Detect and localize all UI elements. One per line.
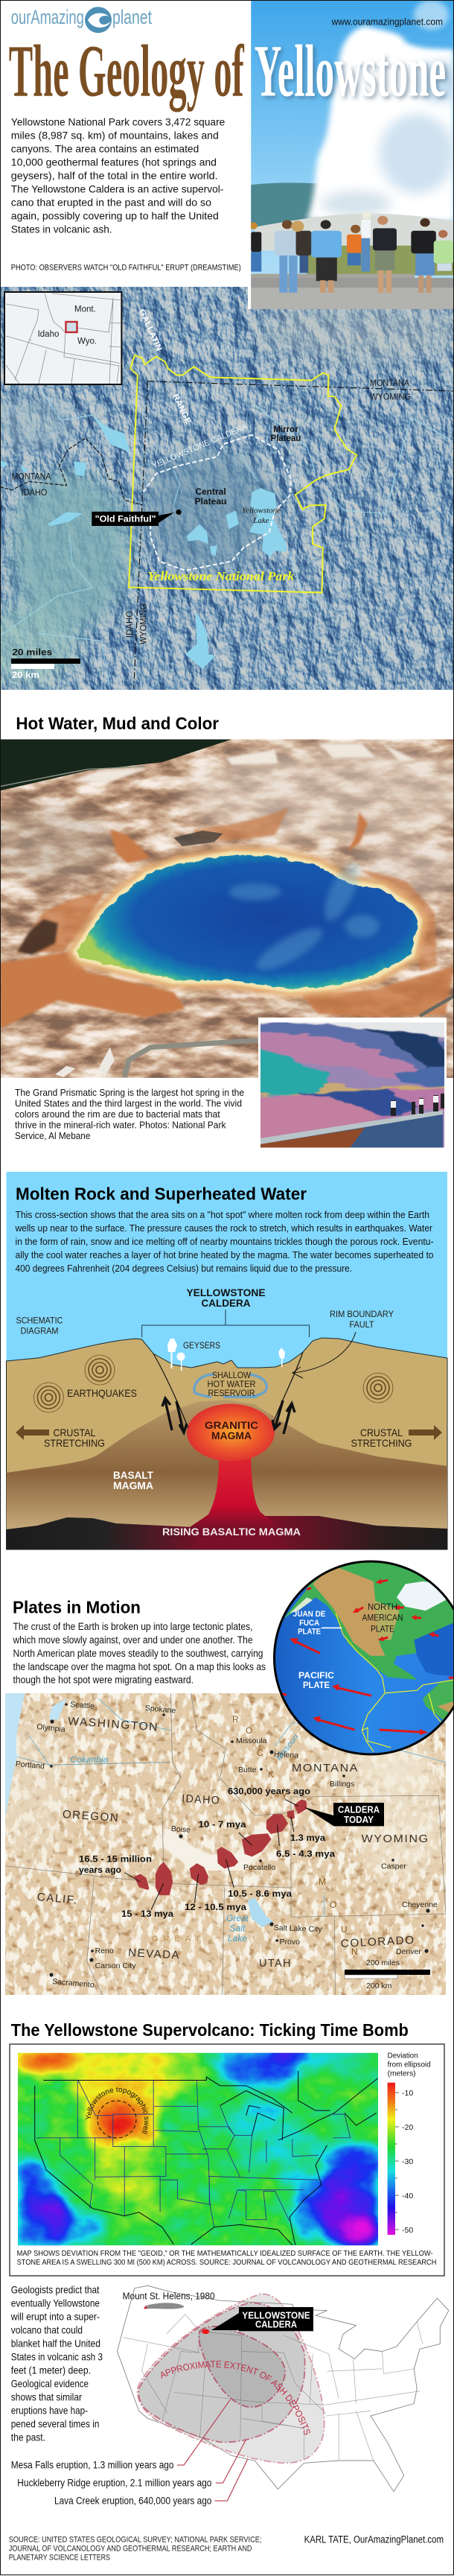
prediction text: blanket half the United: [11, 2337, 100, 2349]
diagram: faults: [153, 1352, 303, 1434]
logo: ourAmazing: [11, 6, 84, 28]
section: plates in motion: [5, 1560, 453, 1995]
website url: www.ouramazingplanet.com: [331, 16, 443, 27]
eruption labels: [11, 2459, 211, 2506]
state and city labels: Denver: [396, 1947, 421, 1956]
inset photo: boardwalk and bacterial mats: [258, 1018, 447, 1147]
diagram: magma plume: [187, 1403, 279, 1527]
state and city labels: Butte: [238, 1766, 257, 1774]
diagram labels: STRETCHING: [44, 1437, 105, 1449]
map labels: MONTANA: [370, 379, 409, 388]
legend: from ellipsoid: [388, 2061, 431, 2069]
curved label: ash deposits: APPROXIMATE EXTENT OF ASH DEPOSITS: [161, 2361, 310, 2434]
diagram labels: FAULT: [350, 1319, 374, 1330]
diagram labels: CRUSTAL: [54, 1427, 96, 1438]
diagram: geysers: [167, 1339, 285, 1371]
diagram labels: YELLOWSTONE: [186, 1287, 265, 1298]
diagram labels: RIM BOUNDARY: [330, 1309, 394, 1319]
leader lines: [124, 1800, 298, 1910]
legend: [388, 2052, 431, 2235]
panel: geoid map: [9, 2043, 445, 2305]
spring caption: thrive in the mineral-rich water. Photos: National Park: [15, 1120, 226, 1131]
prediction text: feet (1 meter) deep.: [11, 2364, 91, 2376]
diagram labels: CRUSTAL: [360, 1427, 403, 1438]
diagram: caldera bracket: [142, 1310, 310, 1337]
globe: tectonic plates: PACIFIC: [298, 1670, 334, 1681]
callout: Yellowstone caldera: CALDERA: [255, 2318, 298, 2330]
caldera outline: [144, 435, 291, 571]
state and city labels: R: [232, 1714, 239, 1725]
callout: Old Faithful: "Old Faithful": [95, 514, 156, 524]
map labels: MONTANA: [12, 473, 51, 482]
photo caption: PHOTO: OBSERVERS WATCH "OLD FAITHFUL" ERUPT (DREAMSTIME): [11, 263, 241, 272]
age labels: [79, 1788, 336, 1919]
map labels: Plateau: [271, 434, 301, 443]
state and city labels: MONTANA: [292, 1762, 359, 1774]
callout: caldera today: CALDERA: [338, 1804, 380, 1815]
eruption labels: Huckleberry Ridge eruption, 2.1 million years ago: [17, 2477, 211, 2488]
state and city labels: U: [341, 1924, 348, 1935]
body text: North American plate moves steadily to the southwest, carrying: [13, 1648, 263, 1659]
age labels: 1.3 mya: [290, 1834, 326, 1843]
map caption: [17, 2249, 436, 2267]
source credits: SOURCE: UNITED STATES GEOLOGICAL SURVEY; NATIONAL PARK SERVICE;: [9, 2535, 261, 2544]
header section: [9, 0, 454, 309]
diagram labels: RISING BASALTIC MAGMA: [162, 1526, 301, 1538]
diagram labels: MAGMA: [113, 1479, 153, 1491]
diagram labels: EARTHQUAKES: [67, 1387, 137, 1399]
logo: [11, 6, 152, 33]
state and city labels: Pocatello: [243, 1863, 275, 1872]
state and city labels: Reno: [95, 1947, 114, 1955]
heading: Plates in Motion: [13, 1598, 141, 1617]
state and city labels: Great: [226, 1913, 249, 1923]
Mount St. Helens label: Mount St. Helens, 1980: [123, 2291, 215, 2302]
map labels: GALLATIN: [137, 308, 164, 352]
city markers: [49, 1703, 430, 1977]
intro text: geysers), half of the total in the entire world.: [11, 169, 218, 181]
age labels: 16.5 - 15 million: [79, 1856, 152, 1865]
state and city labels: Helena: [274, 1750, 299, 1760]
map labels: IDAHO: [21, 489, 47, 498]
state and city labels: Salt Lake City: [274, 1923, 323, 1934]
map labels: Yellowstone: [242, 507, 281, 515]
scale bar: 20 miles: [12, 647, 53, 658]
Yellowstone topographic swell: Yellowstone topographic swell: [86, 2087, 149, 2135]
map labels: Lake: [252, 516, 269, 525]
state boundaries: [0, 381, 454, 689]
prediction text: volcano that could: [11, 2323, 83, 2335]
map labels: IDAHO: [126, 611, 135, 638]
legend: -10: [402, 2089, 413, 2098]
age labels: 10.5 - 8.6 mya: [228, 1890, 292, 1899]
diagram: crust layers: [6, 1338, 447, 1549]
map labels: WYOMING: [140, 603, 149, 644]
map labels: Plateau: [195, 496, 226, 507]
globe: tectonic plates: [274, 1561, 454, 1755]
intro text: The Yellowstone Caldera is an active supervol-: [11, 183, 224, 194]
section: supervolcano: [9, 2020, 450, 2562]
legend: -20: [402, 2123, 413, 2132]
legend: (meters): [388, 2069, 416, 2078]
state and city labels: NEVADA: [128, 1947, 181, 1962]
ash extent map: [11, 2285, 450, 2506]
park boundary: [129, 355, 357, 593]
locator inset map: Idaho: [38, 330, 59, 339]
body text: the landscape over the magma hot spot. On a map this looks as: [13, 1661, 266, 1672]
prediction text: States in volcanic ash 3: [11, 2350, 103, 2362]
diagram labels: CALDERA: [201, 1297, 250, 1309]
intro text: Yellowstone National Park covers 3,472 square: [11, 115, 225, 127]
state and city labels: Spokane: [144, 1704, 176, 1716]
state and city labels: M: [319, 1877, 326, 1887]
state and city labels: Casper: [381, 1862, 406, 1871]
globe: tectonic plates: PLATE: [303, 1680, 330, 1690]
state and city labels: Lake: [228, 1933, 247, 1944]
diagram labels: SCHEMATIC: [16, 1316, 63, 1326]
body text: [13, 1621, 266, 1686]
source credits: JOURNAL OF VOLCANOLOGY AND GEOTHERMAL RESEARCH; EARTH AND: [9, 2544, 252, 2553]
body text: though the hot spot were migrating eastward.: [13, 1675, 194, 1686]
terrain base: [0, 287, 454, 690]
people watching the geyser: [249, 212, 453, 293]
intro text: [11, 115, 225, 235]
caldera location: [202, 2329, 209, 2334]
scale bar: [11, 647, 80, 680]
intro text: States in volcanic ash.: [11, 223, 112, 235]
map labels: Mirror: [273, 425, 298, 434]
locator inset map: Mont.: [74, 305, 96, 314]
state and city labels: Salt: [230, 1923, 246, 1934]
state and city labels: Carson City: [95, 1961, 136, 1970]
map labels: RANGE: [170, 393, 193, 425]
body text: which move slowly against, over and under one another. The: [13, 1634, 252, 1646]
state and city labels: N: [351, 1947, 358, 1957]
intro text: canyons. The area contains an estimated: [11, 142, 199, 154]
age labels: years ago: [79, 1866, 121, 1875]
map labels: Yellowstone National Park: [147, 569, 295, 583]
diagram: crustal stretching arrows: [16, 1425, 442, 1440]
state and city labels: IDAHO: [182, 1792, 221, 1807]
prediction text: shows that similar: [11, 2391, 82, 2402]
hot spot track map: [5, 1693, 446, 1995]
state lines: [123, 2315, 423, 2461]
state and city labels: COLORADO: [340, 1934, 415, 1950]
source credits: PLANETARY SCIENCE LETTERS: [9, 2553, 110, 2562]
Huckleberry Ridge extent: [138, 2303, 305, 2442]
globe: tectonic plates: NORTH: [368, 1602, 397, 1612]
diagram labels: STRETCHING: [351, 1437, 412, 1449]
diagram labels: SHALLOW: [212, 1370, 252, 1380]
diagram: water circulation arrows: [194, 1374, 266, 1397]
section: hot water, mud and color: [0, 714, 454, 1155]
intro text: again, possibly covering up to half the United: [11, 209, 219, 221]
state and city labels: Columbia: [71, 1754, 109, 1765]
map labels: [12, 308, 411, 644]
state and city labels: [15, 1700, 438, 1990]
state and city labels: Sacramento: [52, 1977, 95, 1990]
body text: in the form of rain, snow and ice melting off of nearby mountains trickles though the porous rock. Eventu-: [15, 1236, 433, 1247]
globe: tectonic plates: FUCA: [299, 1619, 319, 1628]
prediction text: eventually Yellowstone: [11, 2297, 100, 2309]
state and city labels: Missoula: [236, 1736, 267, 1745]
heading: The Yellowstone Supervolcano: Ticking Time Bomb: [11, 2020, 409, 2040]
state and city labels: O: [330, 1900, 336, 1910]
state and city labels: K: [268, 1769, 274, 1780]
state and city labels: O: [246, 1725, 252, 1736]
state and city labels: OREGON: [62, 1808, 120, 1824]
eruption labels: Lava Creek eruption, 640,000 years ago: [54, 2495, 211, 2506]
diagram labels: HOT WATER: [207, 1379, 256, 1389]
legend: -30: [402, 2157, 413, 2166]
body text: This cross-section shows that the area sits on a "hot spot" where molten rock from deep within the Earth: [15, 1209, 429, 1220]
locator inset map: Wyo.: [77, 337, 97, 346]
prediction text: will erupt into a super-: [10, 2310, 100, 2322]
globe: tectonic plates: AMERICAN: [362, 1613, 403, 1623]
geoid colour field: [18, 2053, 378, 2245]
diagram labels: GRANITIC: [205, 1419, 258, 1431]
legend: Deviation: [388, 2052, 418, 2061]
map labels: Central: [195, 486, 226, 497]
age labels: 10 - 7 mya: [198, 1821, 246, 1830]
body text: 400 degrees Fahrenheit (204 degrees Celsius) but remains liquid due to the pressure.: [15, 1263, 352, 1274]
lakes: [0, 418, 287, 669]
diagram: earthquake rings: [33, 1355, 393, 1412]
photo: Grand Prismatic Spring: [0, 739, 454, 1079]
spring caption: The Grand Prismatic Spring is the largest hot spring in the: [15, 1088, 244, 1098]
state and city labels: Olympia: [36, 1722, 65, 1734]
callout: Old Faithful: [92, 510, 182, 526]
prediction text: pened several times in: [11, 2417, 99, 2429]
diagram: rim fault pointer: [292, 1332, 356, 1378]
prediction text: Geologists predict that: [11, 2283, 100, 2295]
eruption leader lines: [177, 2399, 248, 2501]
state and city labels: C: [257, 1748, 263, 1758]
Lava Creek extent: [138, 2294, 324, 2463]
age labels: 12 - 10.5 mya: [185, 1903, 247, 1912]
body text: [15, 1209, 434, 1274]
map labels: WYOMING: [370, 393, 411, 402]
spring caption: United States and the third largest in the world. The vivid: [15, 1098, 242, 1108]
map scale bar: [345, 1958, 430, 1990]
diagram labels: MAGMA: [211, 1430, 252, 1441]
callout: Yellowstone caldera: [211, 2307, 313, 2331]
callout: Yellowstone caldera: YELLOWSTONE: [242, 2309, 310, 2320]
state and city labels: Cheyenne: [402, 1900, 438, 1909]
US outline: [118, 2285, 449, 2492]
age labels: 630,000 years ago: [228, 1788, 310, 1797]
body text: ally the cool water reaches a layer of hot brine heated by the magma. The water becomes superheated to: [15, 1249, 433, 1260]
state and city labels: UTAH: [259, 1957, 292, 1970]
spring caption: Service, Al Mebane: [15, 1131, 90, 1141]
legend: -40: [402, 2192, 413, 2201]
globe: tectonic plates: PLATE: [371, 1624, 394, 1634]
callout: caldera today: [304, 1803, 384, 1826]
intro text: cano that erupted in the past and will do so: [11, 196, 211, 208]
diagram labels: RESERVOIR: [208, 1388, 255, 1398]
map base: [5, 1693, 446, 1995]
age labels: 6.5 - 4.3 mya: [276, 1850, 336, 1859]
intro text: miles (8,987 sq. km) of mountains, lakes and: [11, 129, 219, 141]
callout: caldera today: TODAY: [344, 1815, 374, 1825]
diagram labels: GEYSERS: [183, 1340, 220, 1351]
state borders: [35, 2071, 378, 2245]
map scale bar: 200 km: [366, 1982, 392, 1990]
map scale bar: 200 miles: [366, 1958, 400, 1967]
diagram labels: [16, 1287, 412, 1538]
state and city labels: WASHINGTON: [68, 1715, 159, 1734]
locator inset map: [4, 292, 122, 384]
panel: molten rock cross-section: [6, 1172, 447, 1549]
logo: planet: [112, 6, 152, 28]
heading: Molten Rock and Superheated Water: [16, 1184, 307, 1204]
Mesa Falls extent: [199, 2326, 285, 2408]
state and city labels: GREAT: [152, 1935, 205, 1944]
relief map of Yellowstone: [0, 287, 454, 690]
prediction text: [10, 2283, 103, 2443]
heading: Hot Water, Mud and Color: [16, 714, 219, 733]
prediction text: Geological evidence: [11, 2377, 89, 2389]
state and city labels: Y: [281, 1791, 287, 1801]
map labels: YELLOWSTONE CALDERA: [150, 422, 249, 471]
source credits: [9, 2535, 261, 2562]
spring caption: colors around the rim are due to bacterial mats that: [15, 1109, 220, 1120]
globe: tectonic plates: JUAN DE: [293, 1610, 325, 1619]
state and city labels: Portland: [15, 1760, 45, 1771]
spring caption: [15, 1088, 244, 1141]
panel sky background: [6, 1172, 447, 1549]
state and city labels: Billings: [330, 1780, 354, 1789]
age labels: 15 - 13 mya: [121, 1910, 174, 1919]
diagram labels: DIAGRAM: [21, 1326, 58, 1336]
St. Helens plume: [146, 2303, 185, 2309]
prediction text: the past.: [11, 2431, 45, 2443]
diagram labels: BASALT: [113, 1469, 153, 1481]
legend: -50: [402, 2226, 413, 2235]
prediction text: eruptions have hap-: [11, 2404, 88, 2416]
state and city labels: WYOMING: [362, 1833, 429, 1845]
hero photo: Old Faithful eruption: [249, 0, 454, 309]
intro text: 10,000 geothermal features (hot springs and: [11, 156, 217, 168]
scale bar: 20 km: [12, 670, 39, 680]
eruption footprints: [134, 1800, 307, 1895]
eruption labels: Mesa Falls eruption, 1.3 million years ago: [11, 2459, 173, 2470]
globe: tectonic plates: PLATE: [298, 1628, 321, 1637]
state and city labels: Seattle: [70, 1700, 95, 1711]
state and city labels: Missouri: [275, 1733, 301, 1763]
state and city labels: CALIF.: [36, 1891, 78, 1907]
state and city labels: Boise: [170, 1824, 191, 1835]
body text: wells up near to the surface. The pressure causes the rock to stretch, which results in earthquakes. Water: [15, 1222, 433, 1234]
body text: The crust of the Earth is broken up into large tectonic plates,: [13, 1621, 253, 1632]
state and city labels: Provo: [280, 1938, 300, 1947]
